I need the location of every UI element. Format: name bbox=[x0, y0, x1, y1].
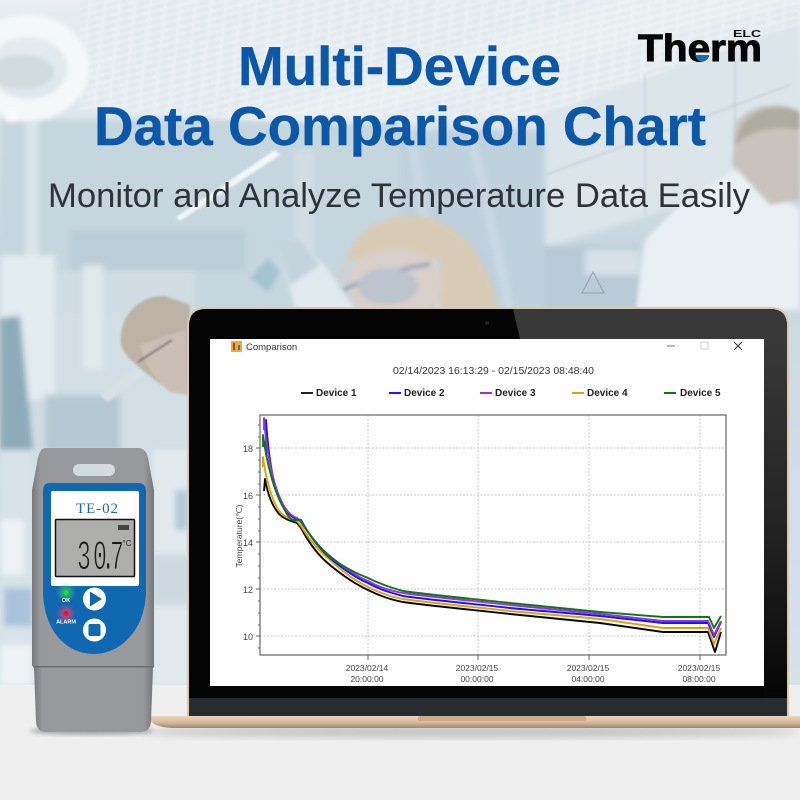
device 5 line bbox=[263, 435, 721, 628]
ceiling tile grid bbox=[80, 0, 800, 125]
device body bbox=[32, 448, 154, 666]
x axis labels: 2023/02/15 bbox=[678, 663, 721, 673]
device lower cap bbox=[34, 667, 153, 732]
x axis labels: 2023/02/15 bbox=[456, 663, 499, 673]
device: TE-02 temperature logger: °C bbox=[122, 539, 132, 548]
line chart bbox=[234, 415, 726, 684]
chart legend: Device 1 bbox=[316, 388, 357, 399]
y axis labels: 16 bbox=[243, 491, 253, 501]
scientist left bbox=[100, 296, 190, 402]
window title bar bbox=[231, 341, 742, 353]
x axis labels bbox=[346, 663, 721, 684]
axes frame bbox=[260, 415, 726, 655]
play button bbox=[83, 588, 106, 610]
x axis labels: 00:00:00 bbox=[460, 674, 494, 684]
chart date range: 02/14/2023 16:13:29 - 02/15/2023 08:48:40 bbox=[393, 366, 594, 377]
y axis labels: 18 bbox=[243, 444, 253, 454]
chart legend: Device 5 bbox=[680, 388, 721, 399]
y axis labels: 12 bbox=[243, 585, 253, 595]
title bbox=[94, 35, 706, 157]
device 2 line bbox=[266, 420, 721, 637]
subtitle: Monitor and Analyze Temperature Data Easily bbox=[48, 177, 750, 215]
laptop shadow bbox=[140, 726, 800, 738]
y axis labels bbox=[243, 444, 253, 642]
window title bar: Comparison bbox=[246, 342, 297, 353]
scientist right bbox=[636, 106, 800, 310]
device: TE-02 temperature logger bbox=[30, 448, 154, 735]
ALARM indicator: ALARM bbox=[56, 620, 76, 626]
chart legend bbox=[301, 388, 721, 399]
camera bbox=[485, 321, 489, 325]
blue panel bbox=[43, 483, 146, 654]
logo: ThermELC: ELC bbox=[733, 29, 761, 40]
LCD reading: 30.7 bbox=[77, 536, 124, 583]
scientist centre bbox=[250, 216, 498, 321]
y axis labels: 10 bbox=[243, 632, 253, 642]
OK indicator bbox=[59, 586, 73, 604]
window controls bbox=[667, 346, 675, 347]
x axis labels: 04:00:00 bbox=[571, 674, 605, 684]
screen bbox=[210, 339, 764, 686]
laptop bbox=[140, 307, 800, 738]
y axis title: Temperature(℃) bbox=[234, 504, 244, 567]
x axis labels: 20:00:00 bbox=[350, 674, 384, 684]
chart legend: Device 3 bbox=[495, 388, 536, 399]
laptop base bbox=[150, 716, 800, 728]
y axis labels: 14 bbox=[243, 538, 253, 548]
floor bbox=[0, 685, 800, 800]
app icon bbox=[231, 341, 242, 352]
lower bezel bbox=[189, 698, 787, 716]
device 3 line bbox=[264, 418, 721, 635]
x axis labels: 08:00:00 bbox=[682, 674, 716, 684]
ALARM indicator bbox=[56, 606, 76, 626]
ceiling lamp bbox=[0, 26, 78, 122]
chart legend: Device 4 bbox=[587, 388, 628, 399]
device shadow bbox=[30, 727, 154, 735]
hanging slot bbox=[73, 464, 115, 476]
white label bbox=[51, 491, 139, 586]
title: Data Comparison Chart bbox=[94, 95, 706, 157]
grid bbox=[260, 415, 726, 655]
ticks bbox=[256, 425, 700, 660]
x axis labels: 2023/02/14 bbox=[346, 663, 389, 673]
device 4 line bbox=[263, 457, 721, 644]
title: Multi-Device bbox=[238, 35, 561, 97]
bezel reflection bbox=[513, 309, 787, 339]
device 1 line bbox=[264, 479, 721, 652]
series bbox=[263, 418, 721, 652]
LCD screen bbox=[56, 520, 134, 576]
battery icon bbox=[118, 525, 129, 530]
x axis labels: 2023/02/15 bbox=[567, 663, 610, 673]
laptop lid bbox=[187, 307, 789, 718]
logo: ThermELC: Therm bbox=[638, 28, 762, 70]
chart legend: Device 2 bbox=[404, 388, 445, 399]
stop button bbox=[83, 618, 106, 642]
OK indicator: OK bbox=[62, 598, 70, 604]
model name: TE-02 bbox=[76, 501, 118, 517]
hinge notch bbox=[418, 716, 586, 721]
warning sign bbox=[582, 272, 604, 293]
light streaks bbox=[176, 42, 790, 221]
